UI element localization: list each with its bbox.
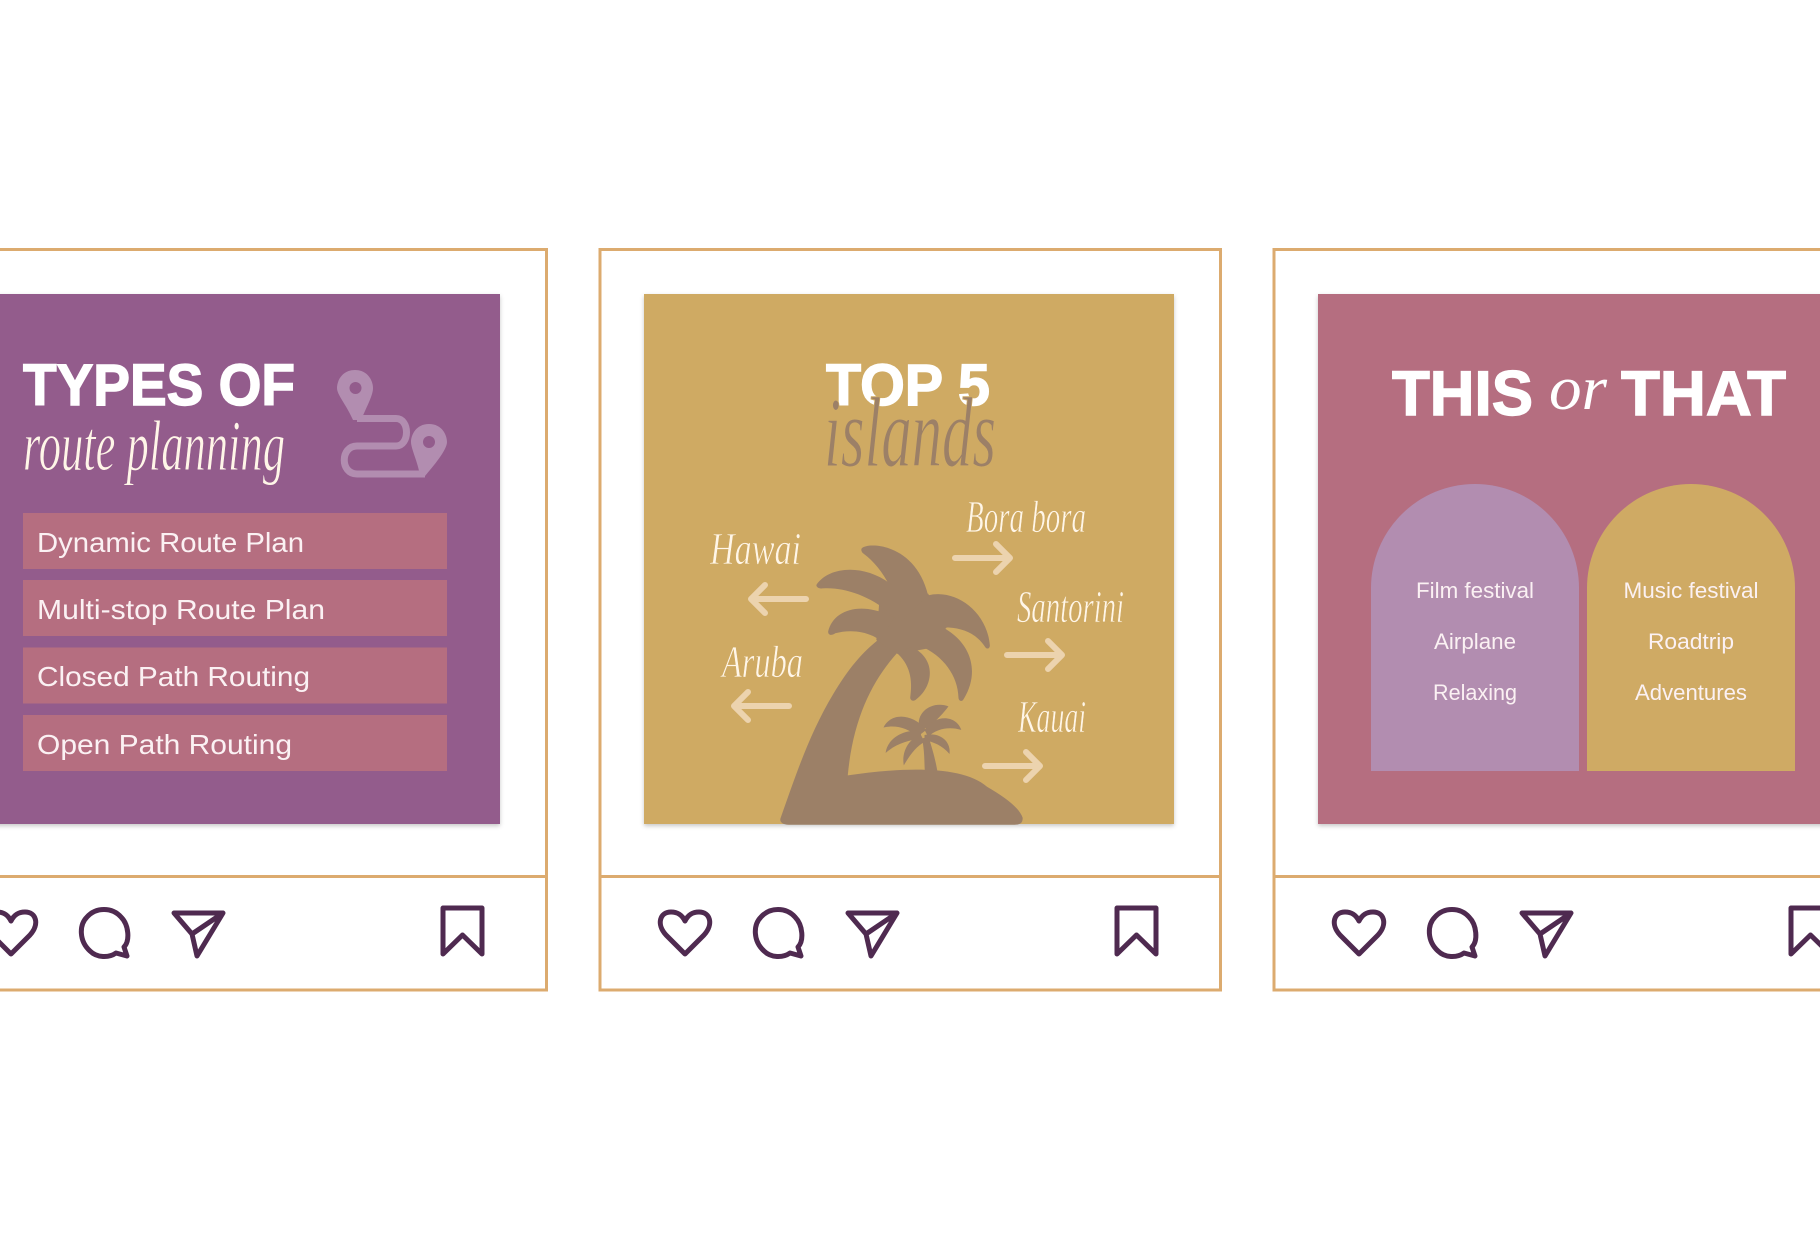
icon: bookmark: [1791, 908, 1820, 954]
list row: multi-stop route plan: Multi-stop Route Plan: [37, 594, 325, 625]
label: kauai: Kauai: [1017, 691, 1086, 742]
icon: comment: [755, 910, 802, 957]
icon: send: [848, 913, 897, 956]
list row: closed path routing: Closed Path Routing: [37, 661, 310, 692]
arch: this options: [1371, 484, 1579, 771]
icon: send: [174, 913, 223, 956]
list row: multi-stop route plan: [23, 580, 447, 636]
card frame: [0, 250, 546, 990]
arch: this options: Relaxing: [1433, 680, 1517, 705]
icon: heart: [0, 912, 36, 954]
footer divider: [0, 875, 546, 878]
icon: comment: [81, 910, 128, 957]
card frame: [600, 250, 1220, 990]
list row: open path routing: [23, 715, 447, 771]
icon: heart: [660, 912, 710, 954]
card 2: top 5 islands post: [600, 250, 1220, 990]
heading: that: THAT: [1621, 359, 1786, 429]
arrow: to kauai: [985, 752, 1040, 780]
label: bora bora: Bora bora: [966, 491, 1086, 542]
icon: route with two map pins: [337, 370, 447, 476]
action icons: [660, 908, 1156, 957]
arrow: to santorini: [1007, 641, 1062, 669]
icon: bookmark: [443, 908, 482, 954]
script subheading: route planning: route planning: [23, 406, 285, 486]
panel background: [644, 294, 1174, 824]
card frame: [1274, 250, 1820, 990]
arch: that options: Roadtrip: [1648, 629, 1734, 654]
list row: dynamic route plan: [23, 513, 447, 569]
arrow: to bora bora: [955, 544, 1010, 572]
panel: top 5 islands: [644, 294, 1174, 825]
label: aruba: Aruba: [720, 636, 803, 687]
icon: bookmark: [1117, 908, 1156, 954]
panel: route planning: [0, 294, 500, 824]
list row: open path routing: Open Path Routing: [37, 729, 292, 760]
footer divider: [600, 875, 1220, 878]
arrow: to hawai: [751, 585, 806, 613]
heading: types of: TYPES OF: [23, 353, 295, 418]
script word: or: or: [1549, 355, 1608, 423]
list row: closed path routing: [23, 648, 447, 704]
heading: this: THIS: [1392, 359, 1533, 429]
panel background: [1318, 294, 1820, 824]
arch: this options: Film festival: [1416, 578, 1534, 603]
arrow: to aruba: [734, 692, 789, 720]
action icons: [0, 908, 482, 957]
arch: that options: Adventures: [1635, 680, 1747, 705]
list row: dynamic route plan: Dynamic Route Plan: [37, 527, 304, 558]
heading: top 5: TOP 5: [826, 353, 990, 418]
label: hawai: Hawai: [709, 523, 801, 574]
card 1: route planning post: [0, 250, 546, 990]
arch: that options: Music festival: [1624, 578, 1758, 603]
footer divider: [1274, 875, 1820, 878]
icon: send: [1522, 913, 1571, 956]
icon: comment: [1429, 910, 1476, 957]
script subheading: islands: islands: [824, 377, 996, 488]
card 3: this or that post: [1274, 250, 1820, 990]
panel background: [0, 294, 500, 824]
illustration: palm trees on island: [780, 546, 1023, 825]
action icons: [1334, 908, 1820, 957]
arch: this options: Airplane: [1434, 629, 1516, 654]
arch: that options: [1587, 484, 1795, 771]
label: santorini: Santorini: [1017, 581, 1124, 632]
panel: this or that: [1318, 294, 1820, 824]
icon: heart: [1334, 912, 1384, 954]
